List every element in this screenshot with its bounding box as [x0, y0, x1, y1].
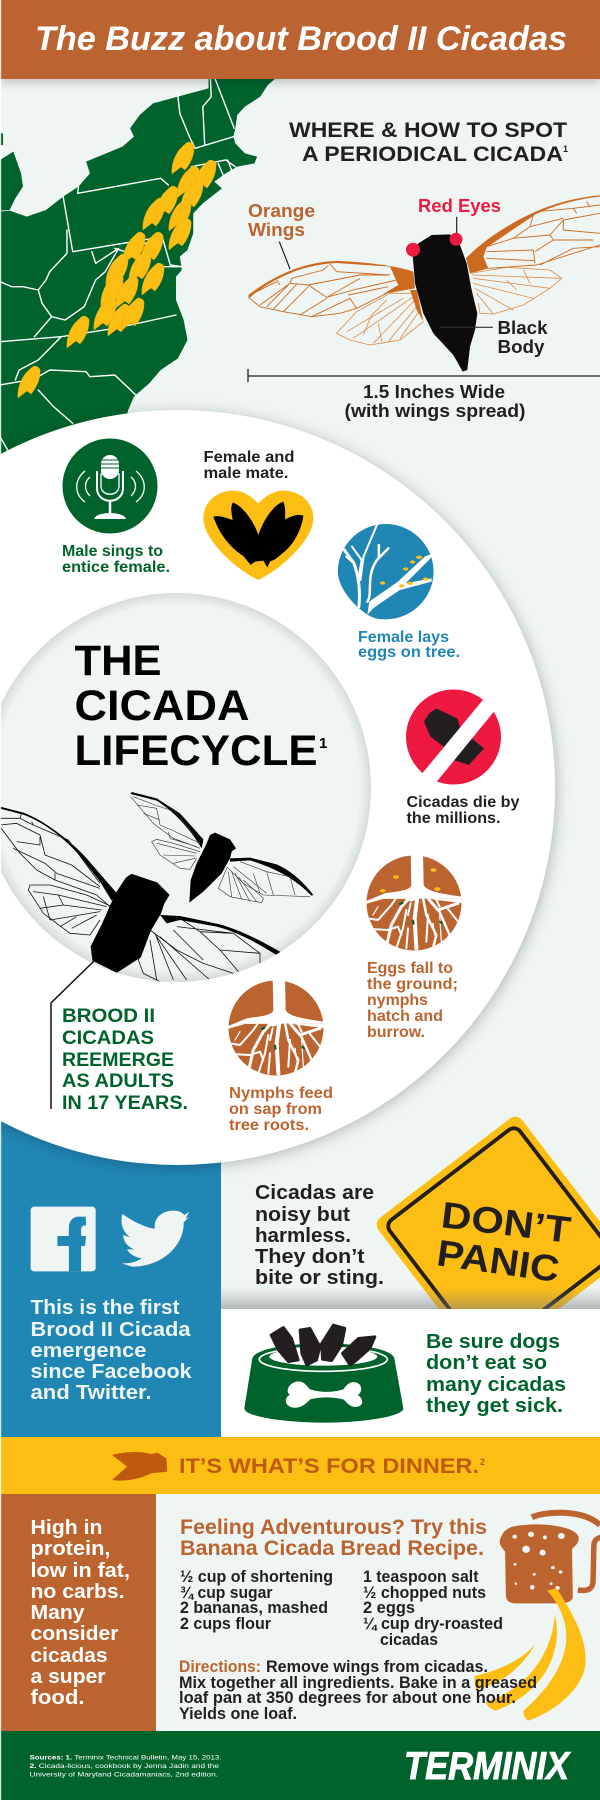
shadow above the white panel: [221, 1287, 600, 1309]
step: female lays eggs: Female lays: [358, 629, 449, 646]
band: it's what's for dinner: IT’S WHAT’S FOR DINNER.: [179, 1455, 479, 1478]
text: noisy but harmless: They don’t: [255, 1245, 365, 1268]
sources: University of Maryland Cicadamaniacs, 2nd edition.: [30, 1772, 218, 1778]
panel: superfood brown: Many: [30, 1601, 85, 1624]
step: female and male mate: Female and: [204, 449, 294, 466]
icon: roots with eggs: [365, 852, 465, 952]
callout: brood II reemerge: IN 17 YEARS.: [62, 1092, 188, 1114]
icon: facebook: [31, 1207, 96, 1271]
ingredients right column: 1 teaspoon salt: [363, 1568, 479, 1586]
label: orange wings: Orange: [248, 201, 315, 221]
icon: tree with eggs: [338, 524, 434, 619]
step: female and male mate: male mate.: [204, 465, 288, 482]
sign text: don't panic: [434, 1194, 573, 1290]
text: noisy but harmless: Cicadas are: [255, 1181, 374, 1204]
step: nymphs feed: tree roots.: [229, 1117, 309, 1134]
step: eggs fall: burrow.: [367, 1024, 425, 1041]
step: male sings: Male sings to: [62, 543, 163, 560]
text: noisy but harmless: bite or sting.: [255, 1266, 384, 1289]
text: dogs warning: [426, 1330, 566, 1417]
panel: superfood brown: High in: [30, 1516, 102, 1539]
text: dogs warning: Be sure dogs: [426, 1330, 560, 1353]
title: the cicada lifecycle: LIFECYCLE: [74, 727, 318, 775]
label: red eyes: [418, 196, 501, 233]
recipe heading: Banana Cicada Bread Recipe.: [180, 1536, 484, 1560]
logo: terminix: TERMINIX: [404, 1745, 571, 1788]
step: male sings: entice female.: [62, 559, 170, 576]
icon: orange cicada: [112, 1452, 167, 1481]
panel: superfood brown: a super: [30, 1665, 106, 1688]
sources: Sources: 1. Terminix Technical Bulletin, May 15, 2013.: [30, 1754, 222, 1762]
panel: superfood brown: low in fat,: [30, 1559, 130, 1582]
panel: superfood brown: no carbs.: [30, 1580, 124, 1603]
text: dogs warning: many cicadas: [426, 1373, 566, 1396]
ingredients right column: [363, 1568, 503, 1649]
label: black body: Black: [498, 318, 549, 338]
step: female lays eggs: eggs on tree.: [358, 644, 460, 661]
step: eggs fall: nymphs: [367, 992, 428, 1009]
sign text: don't panic: PANIC: [434, 1232, 562, 1290]
title: The Buzz about Brood II Cicadas: [35, 20, 567, 58]
text: noisy but harmless: noisy but: [255, 1203, 350, 1226]
step: eggs fall: the ground;: [367, 976, 458, 993]
panel: superfood brown: [0, 1494, 156, 1731]
panel: superfood brown: food.: [30, 1686, 84, 1709]
step: eggs fall: [365, 852, 465, 1041]
ingredients left column: 2 bananas, mashed: [180, 1599, 328, 1617]
lifecycle inner circle: [0, 593, 371, 982]
step: cicadas die: [406, 684, 520, 827]
text: dogs warning: don’t eat so: [426, 1351, 547, 1374]
icon: bread and bananas: [474, 1513, 600, 1721]
measure: 1.5 inches wide: [248, 369, 600, 421]
icon: crossed-out cicada: [406, 684, 508, 801]
ingredients left column: [180, 1568, 333, 1633]
callout: brood II reemerge: AS ADULTS: [62, 1070, 174, 1092]
step: cicadas die: the millions.: [406, 810, 500, 827]
icon: dog bowl with cicadas: [244, 1325, 403, 1423]
step: female lays eggs: [338, 524, 460, 661]
callout: brood II reemerge: BROOD II: [62, 1005, 155, 1027]
map: eastern United States: [0, 73, 281, 467]
icon: cicada bodies: [92, 792, 313, 972]
callout: brood II reemerge: CICADAS: [62, 1027, 154, 1049]
band: it's what's for dinner: [0, 1437, 600, 1494]
label: orange wings: Wings: [248, 220, 305, 240]
title: the cicada lifecycle: [74, 637, 327, 775]
label: orange wings: [248, 201, 315, 269]
step: female and male mate: [203, 449, 313, 580]
panel: dog bowl white: [221, 1309, 600, 1437]
label: black body: [440, 318, 549, 357]
step: nymphs feed: [227, 977, 333, 1134]
panel: superfood brown: protein,: [30, 1537, 110, 1560]
band: it's what's for dinner: 2: [480, 1457, 485, 1467]
title: the cicada lifecycle: CICADA: [74, 682, 250, 730]
label: red eyes: Red Eyes: [418, 196, 501, 216]
callout: brood II reemerge: [51, 961, 188, 1114]
panel: superfood brown: cicadas: [30, 1644, 108, 1667]
text: noisy but harmless: [255, 1181, 384, 1289]
heading: where and how to spot: [289, 119, 568, 166]
lifecycle white circle: [0, 410, 555, 1165]
recipe: [179, 1515, 537, 1723]
sources: 2. Cicada-licious, cookbook by Jenna Jadin and the: [30, 1763, 219, 1770]
heading: where and how to spot: WHERE & HOW TO SPOT: [289, 119, 567, 142]
cicada markers on map: [18, 142, 216, 398]
measure: 1.5 inches wide: (with wings spread): [344, 401, 526, 421]
heading: where and how to spot: A PERIODICAL CICADA: [302, 143, 563, 166]
panel: social media blue: [0, 1100, 600, 1437]
directions: Directions:: [179, 1658, 261, 1676]
step: cicadas die: Cicadas die by: [406, 794, 520, 811]
step: eggs fall: hatch and: [367, 1008, 443, 1025]
icon: tree roots: [227, 977, 327, 1077]
recipe heading: Feeling Adventurous? Try this: [180, 1515, 487, 1539]
step: eggs fall: Eggs fall to: [367, 960, 453, 977]
directions: Yields one loaf.: [179, 1705, 297, 1723]
callout: brood II reemerge: REEMERGE: [62, 1049, 174, 1071]
ingredients right column: cicadas: [380, 1631, 438, 1649]
ingredients right column: ¼ cup dry-roasted: [363, 1615, 503, 1633]
red eyes: [406, 233, 462, 257]
diagram: periodical cicada with orange wings: [248, 195, 600, 372]
icon: heart with mating cicadas: [203, 491, 313, 580]
panel: superfood brown: consider: [30, 1622, 119, 1645]
directions: [179, 1658, 537, 1723]
footer: [0, 1731, 600, 1800]
icon: large and small black cicadas: [0, 807, 282, 983]
directions: Mix together all ingredients. Bake in a greased: [179, 1674, 537, 1692]
ingredients right column: ½ chopped nuts: [363, 1584, 486, 1602]
icon: microphone: [62, 438, 158, 534]
text: first emergence since facebook: [30, 1296, 192, 1404]
icon: twitter: [121, 1211, 189, 1267]
title: the cicada lifecycle: THE: [74, 637, 162, 685]
sign text: don't panic: DON’T: [439, 1194, 573, 1251]
ingredients left column: ¾ cup sugar: [180, 1584, 273, 1602]
measure: 1.5 inches wide: 1.5 Inches Wide: [363, 382, 505, 402]
ingredients left column: 2 cups flour: [180, 1615, 272, 1633]
text: noisy but harmless: harmless.: [255, 1224, 351, 1247]
directions: Remove wings from cicadas.: [266, 1658, 488, 1676]
text: first emergence since facebook: since Facebook: [30, 1360, 192, 1383]
text: first emergence since facebook: emergence: [30, 1339, 146, 1362]
sources: [30, 1754, 222, 1778]
step: nymphs feed: Nymphs feed: [229, 1085, 333, 1102]
panel: don't panic sign: [376, 1116, 600, 1309]
step: nymphs feed: on sap from: [229, 1101, 322, 1118]
text: dogs warning: they get sick.: [426, 1394, 563, 1417]
heading: where and how to spot: 1: [563, 144, 568, 154]
directions: loaf pan at 350 degrees for about one hour.: [179, 1689, 516, 1707]
text: first emergence since facebook: and Twitter.: [30, 1381, 152, 1404]
text: first emergence since facebook: Brood II Cicada: [30, 1318, 191, 1341]
ingredients left column: ½ cup of shortening: [180, 1568, 333, 1586]
recipe heading: [180, 1515, 487, 1560]
title: the cicada lifecycle: 1: [319, 735, 327, 752]
label: black body: Body: [498, 337, 544, 357]
text: first emergence since facebook: This is the first: [30, 1296, 180, 1319]
step: male sings: [62, 438, 170, 576]
header bar: [0, 0, 600, 79]
ingredients right column: 2 eggs: [363, 1599, 415, 1617]
